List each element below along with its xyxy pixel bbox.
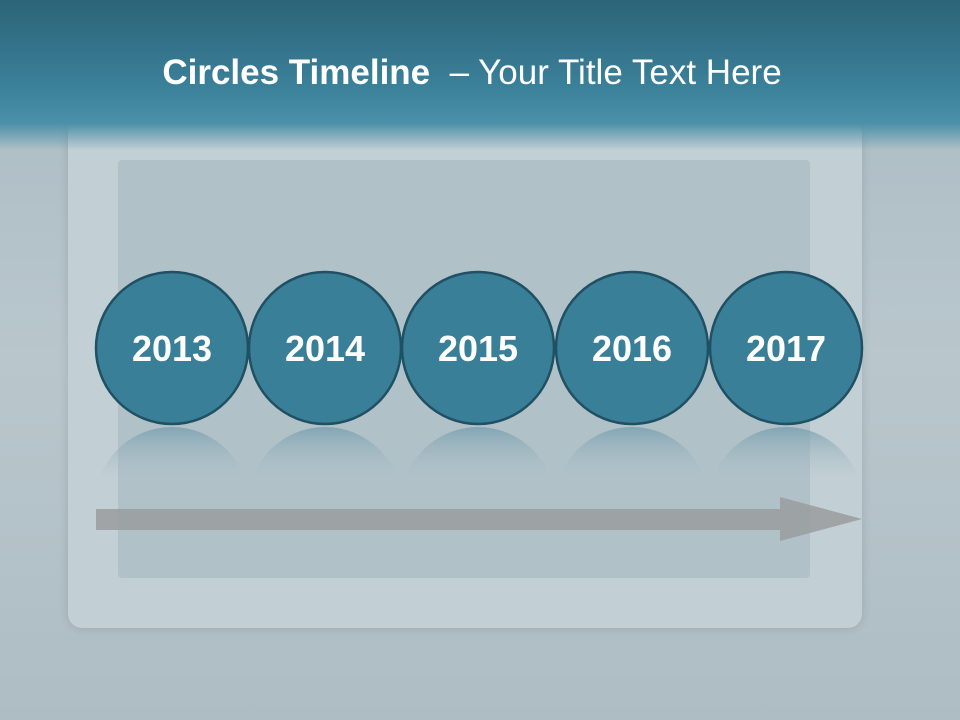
title: Circles Timeline – Your Title Text Here xyxy=(162,53,782,92)
circle 2016 xyxy=(556,272,708,424)
circle 2017 xyxy=(710,272,862,424)
circle 2015: 2015 xyxy=(438,328,518,369)
circle 2013 xyxy=(96,272,248,424)
header band xyxy=(0,0,960,150)
tablet panel xyxy=(68,120,862,628)
circle 2013: 2013 xyxy=(132,328,212,369)
tablet screen xyxy=(118,160,810,578)
circle 2017: 2017 xyxy=(746,328,826,369)
circle 2014: 2014 xyxy=(285,328,365,369)
reflections of circles xyxy=(107,427,850,464)
circle 2016: 2016 xyxy=(592,328,672,369)
circle 2015 xyxy=(402,272,554,424)
circle 2014 xyxy=(249,272,401,424)
